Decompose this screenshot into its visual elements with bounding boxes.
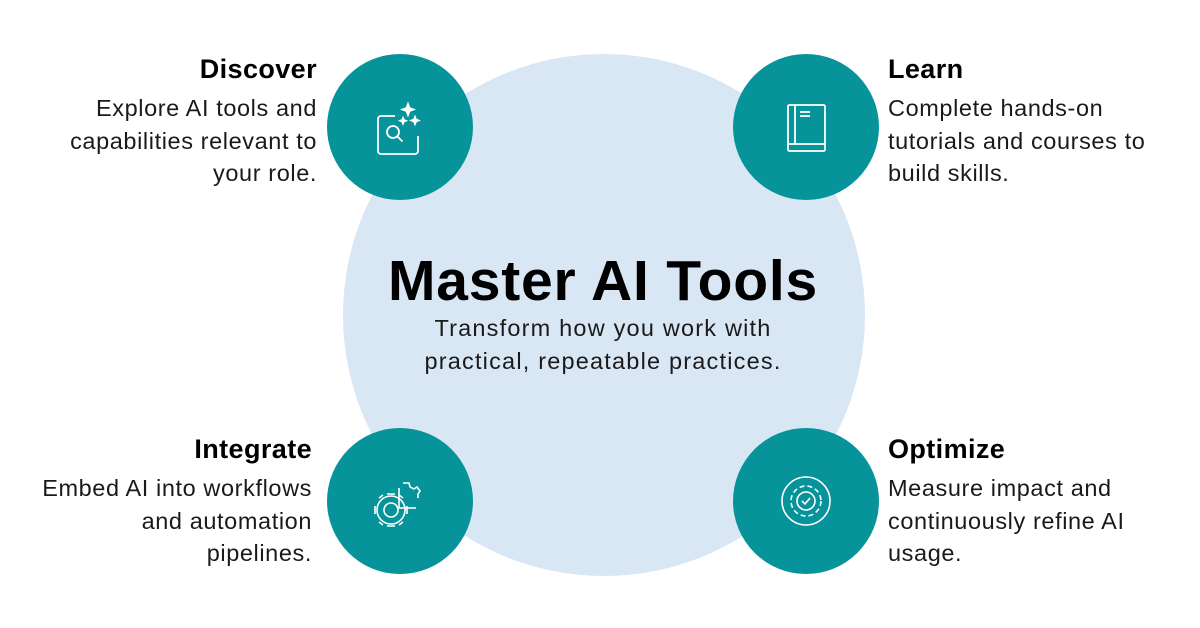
text: optimize: continuously refine AI bbox=[888, 508, 1125, 534]
circle: learn bbox=[733, 54, 879, 200]
text: discover bbox=[70, 54, 317, 186]
text: learn: Complete hands-on bbox=[888, 95, 1103, 121]
circle: discover bbox=[327, 54, 473, 200]
subtitle bbox=[424, 315, 782, 374]
text: learn: tutorials and courses to bbox=[888, 128, 1145, 154]
text: learn: build skills. bbox=[888, 160, 1009, 186]
text: discover: Explore AI tools and bbox=[96, 95, 317, 121]
icon: gear check cycle bbox=[781, 476, 831, 526]
text: optimize: usage. bbox=[888, 540, 962, 566]
text: optimize: Measure impact and bbox=[888, 475, 1112, 501]
text: integrate: and automation bbox=[142, 508, 312, 534]
text: learn bbox=[888, 54, 1145, 186]
text: discover: Discover bbox=[200, 54, 317, 84]
text: integrate: Integrate bbox=[194, 434, 312, 464]
subtitle: Transform how you work with bbox=[434, 315, 772, 341]
title: Master AI Tools bbox=[388, 249, 818, 313]
text: optimize: Optimize bbox=[888, 434, 1005, 464]
circle: integrate bbox=[327, 428, 473, 574]
text: discover: capabilities relevant to bbox=[70, 128, 317, 154]
big central circle bbox=[343, 54, 865, 576]
icon: gears bbox=[374, 482, 421, 527]
icon: search sparkle bbox=[377, 102, 421, 155]
subtitle: practical, repeatable practices. bbox=[424, 348, 782, 374]
text: learn: Learn bbox=[888, 54, 964, 84]
text: integrate: pipelines. bbox=[207, 540, 312, 566]
text: optimize bbox=[888, 434, 1125, 566]
icon: book bbox=[787, 104, 826, 152]
text: discover: your role. bbox=[213, 160, 317, 186]
text: integrate bbox=[42, 434, 312, 566]
circle: optimize bbox=[733, 428, 879, 574]
text: integrate: Embed AI into workflows bbox=[42, 475, 312, 501]
